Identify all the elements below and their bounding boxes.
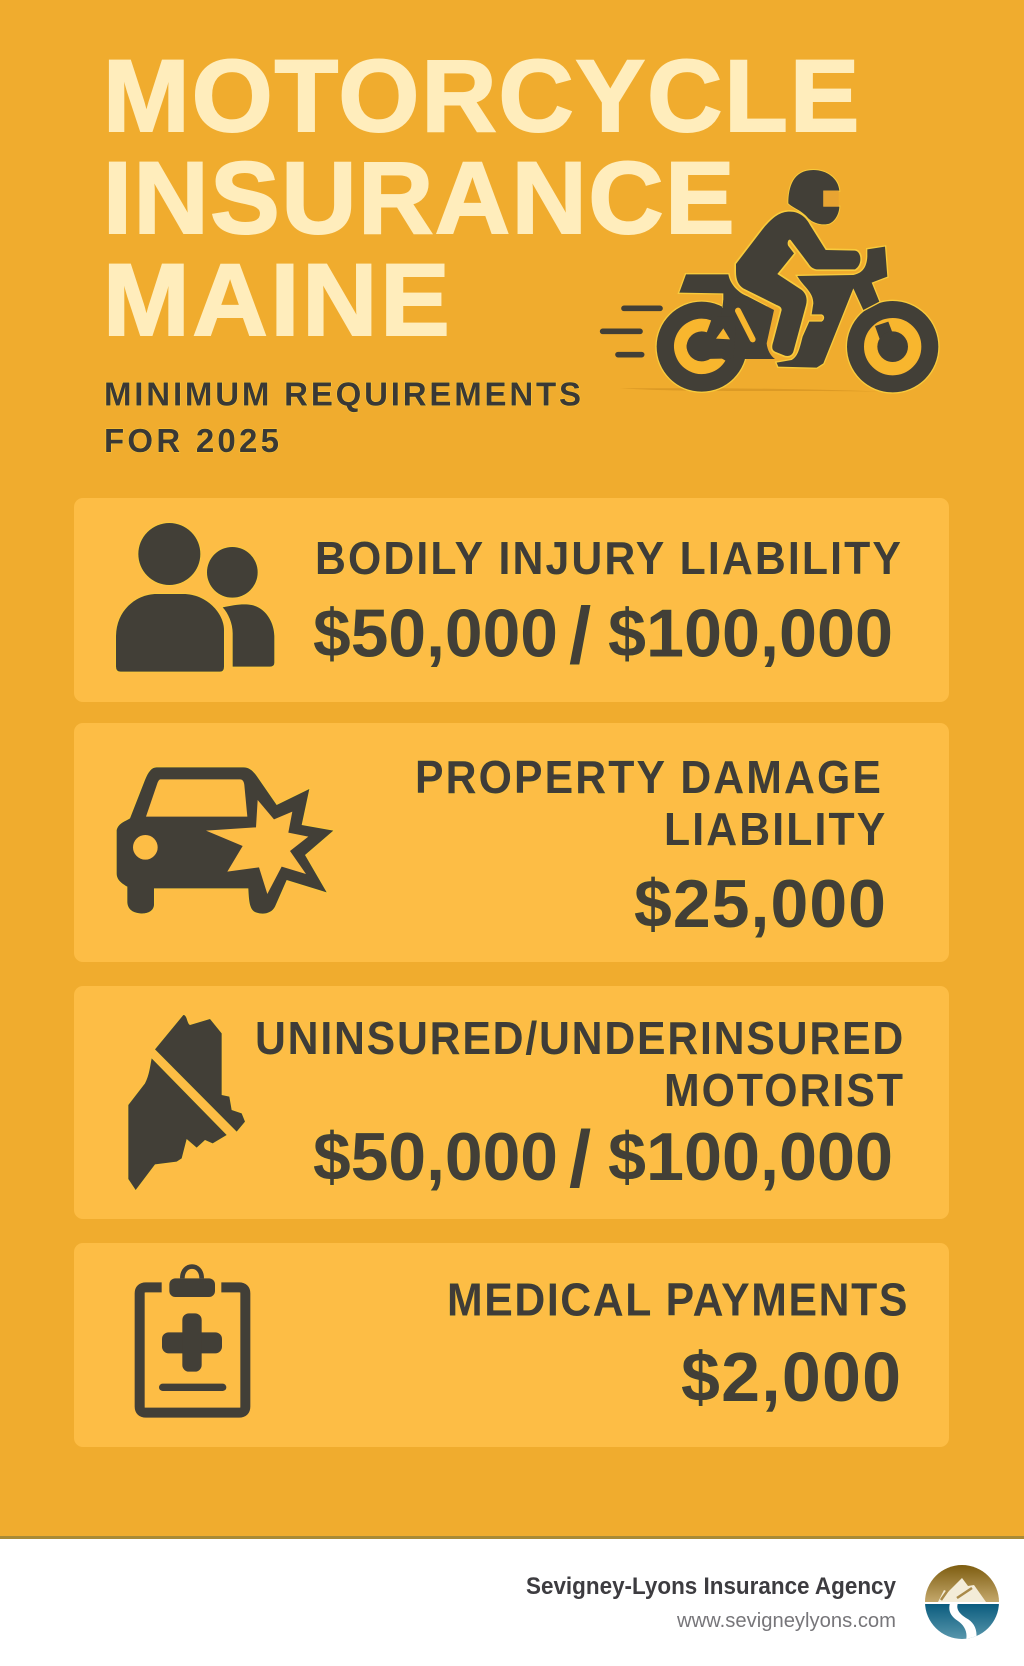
amount: $50,000 / $100,000 (313, 591, 893, 680)
title (103, 39, 861, 357)
amount: $50,000 / $100,000: $100,000 (608, 1119, 893, 1195)
heading: property damage liability (415, 753, 885, 855)
agency name: Sevigney-Lyons Insurance Agency (526, 1573, 897, 1600)
amount: $50,000 / $100,000: $100,000 (608, 596, 893, 672)
icon: car crash (117, 767, 333, 914)
icon: Maine state map (128, 1015, 245, 1190)
amount: $50,000 / $100,000: / (569, 1114, 591, 1204)
panel: medical payments (74, 1243, 949, 1447)
amount: $50,000 / $100,000: $50,000 (313, 1119, 558, 1195)
icon: agency logo (925, 1565, 999, 1640)
title: MAINE (103, 243, 452, 357)
amount: $2,000: $2,000 (681, 1338, 901, 1416)
amount: $50,000 / $100,000: / (569, 591, 591, 680)
subtitle (104, 376, 581, 459)
heading: medical payments: MEDICAL PAYMENTS (447, 1275, 907, 1326)
amount: $25,000: $25,000 (634, 866, 886, 942)
icon: people (116, 523, 274, 672)
subtitle: MINIMUM REQUIREMENTS (104, 376, 581, 412)
title: MOTORCYCLE (103, 39, 861, 153)
panel: bodily injury liability (74, 498, 949, 702)
heading: uninsured/underinsured motorist: UNINSURED/UNDERINSURED (255, 1014, 903, 1064)
title: INSURANCE (103, 141, 736, 255)
heading: bodily injury liability: BODILY INJURY LIABILITY (315, 534, 901, 584)
icon: motorcycle rider (603, 170, 938, 392)
amount: $50,000 / $100,000 (313, 1114, 893, 1204)
heading: property damage liability: LIABILITY (664, 805, 885, 855)
subtitle: FOR 2025 (104, 422, 279, 459)
icon: medical clipboard (140, 1267, 245, 1413)
heading: property damage liability: PROPERTY DAMAGE (415, 753, 881, 803)
panel: property damage liability (74, 723, 949, 962)
website: www.sevigneylyons.com (676, 1610, 896, 1632)
heading: uninsured/underinsured motorist (255, 1014, 903, 1116)
heading: uninsured/underinsured motorist: MOTORIST (664, 1066, 903, 1116)
panel: uninsured/underinsured motorist (74, 986, 949, 1219)
footer (0, 1536, 1024, 1666)
amount: $50,000 / $100,000: $50,000 (313, 596, 558, 672)
